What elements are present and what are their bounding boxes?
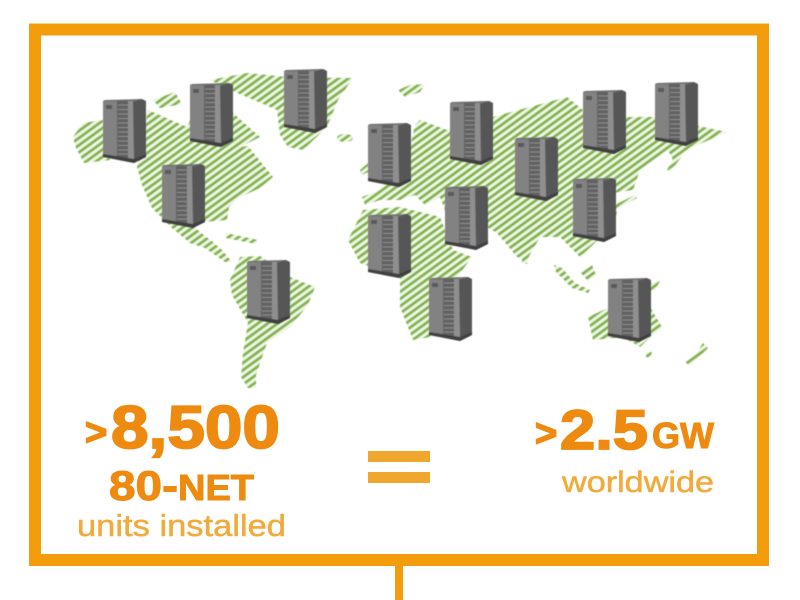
- Sri Lanka: [522, 258, 528, 264]
- Alaska: [73, 120, 110, 163]
- connector stem: [395, 566, 403, 600]
- Japan: [667, 150, 682, 171]
- unit: GW: GW: [652, 415, 714, 456]
- Philippines: [600, 195, 637, 215]
- server 11: [573, 178, 616, 242]
- server 12: [445, 186, 488, 250]
- server 6: [368, 123, 411, 187]
- New Guinea: [640, 281, 660, 292]
- British Isles: [360, 163, 369, 175]
- server 14: [429, 277, 472, 341]
- Caribbean: [226, 233, 258, 244]
- server 4: [162, 164, 205, 228]
- greater-than sign: >: [535, 413, 557, 455]
- Svalbard: [398, 84, 425, 97]
- Greenland and Arctic: [210, 73, 353, 150]
- South America: [230, 256, 315, 388]
- stat: units installed: [77, 394, 286, 543]
- Indonesia: [554, 265, 590, 293]
- equals sign: [368, 451, 430, 483]
- Africa: [348, 207, 472, 340]
- figure: 2.5: 2.5: [560, 398, 648, 461]
- label: NET: NET: [178, 467, 254, 508]
- Iceland: [337, 134, 353, 142]
- Tasmania: [646, 352, 652, 358]
- server 5: [247, 260, 290, 324]
- New Zealand: [685, 343, 708, 366]
- server 15: [608, 278, 651, 342]
- figure: 8,500: 8,500: [111, 394, 280, 461]
- label: 80-: 80-: [109, 462, 178, 509]
- caption: worldwide: worldwide: [561, 466, 714, 499]
- server 8: [515, 137, 558, 201]
- caption: units installed: units installed: [77, 508, 286, 543]
- Canadian Arctic: [153, 92, 182, 108]
- Australia: [588, 307, 662, 347]
- greater-than sign: >: [85, 412, 107, 454]
- world map: [73, 73, 727, 388]
- server 3: [284, 69, 327, 133]
- server 9: [583, 90, 626, 154]
- server 13: [368, 214, 411, 278]
- server 2: [190, 83, 233, 147]
- server units: [103, 69, 698, 342]
- server 10: [655, 82, 698, 146]
- Borneo: [580, 265, 596, 281]
- North America: [137, 100, 273, 262]
- stat: capacity: [535, 398, 714, 499]
- server 7: [450, 101, 493, 165]
- Eurasia: [362, 97, 727, 260]
- server 1: [103, 99, 146, 163]
